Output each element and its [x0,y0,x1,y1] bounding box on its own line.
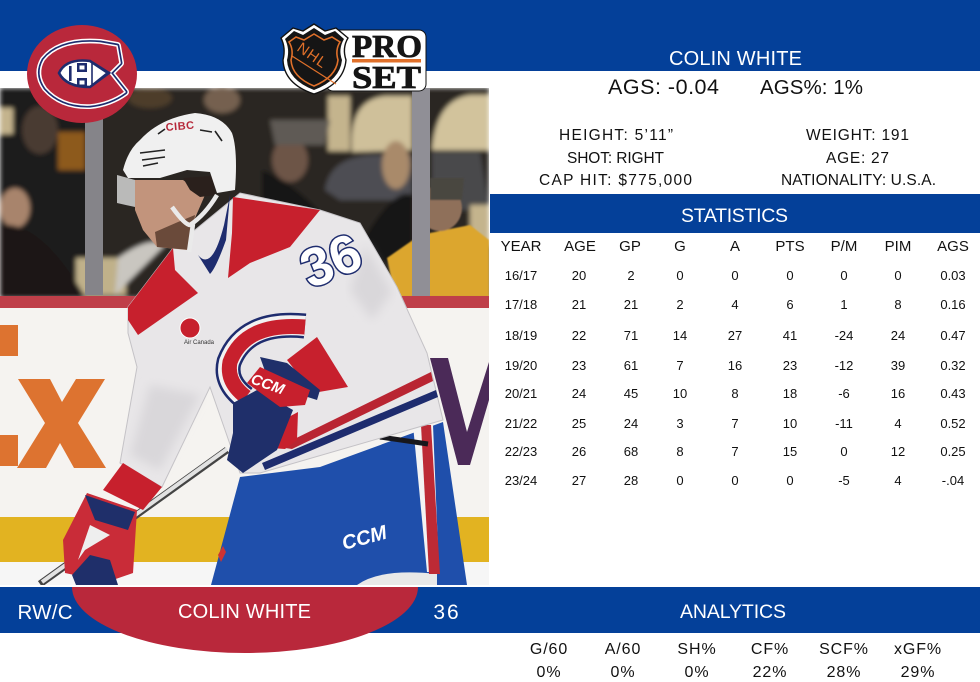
red board cap [0,296,489,308]
row 20/21: 20/21 [505,386,537,401]
row 16/17: 0.03 [940,268,966,283]
SCF% metric [819,641,869,681]
G/60 metric [530,641,568,681]
helmet [123,113,236,252]
pants [211,422,467,585]
panel divider white [489,71,980,194]
SH% metric [677,641,717,681]
Pro Set logo: NHL [294,39,331,72]
player bio: right column: AGE: 27 [826,150,889,167]
row 18/19: 18/19 [505,328,537,343]
player name heading: COLIN WHITE [669,48,802,70]
row 16/17: 2 [627,268,635,283]
board advertisement [0,325,489,468]
row 18/19: 24 [891,328,905,343]
row 22/23: 0 [840,444,848,459]
ice [0,562,489,585]
row 22/23: 7 [731,444,739,459]
player bio: right column [781,127,936,189]
row 23/24: 0 [676,473,684,488]
SCF% metric: 28% [827,664,861,681]
row 20/21: 16 [891,386,905,401]
yellow hoodie spectator [387,178,489,297]
row 17/18: 0.16 [940,297,966,312]
xGF% metric: 29% [901,664,935,681]
table header: PIM [885,238,911,255]
Pro Set logo [281,24,426,95]
helmet: CIBC [165,120,195,134]
row 19/20: 39 [891,358,905,373]
row 22/23: 22/23 [505,444,537,459]
row 22/23 [505,444,966,459]
row 20/21 [505,386,966,401]
row 16/17: 0 [786,268,794,283]
xGF% metric [894,641,942,681]
maple leaf patch: Air Canada [184,340,215,346]
nameplate text: COLIN WHITE [178,601,311,623]
player bio: left column: CAP HIT: $775,000 [539,172,692,189]
row 17/18: 2 [676,297,684,312]
row 20/21: 45 [624,386,638,401]
A/60 metric: A/60 [605,641,641,658]
row 21/22 [505,416,966,431]
table header: PTS [775,238,805,255]
stick [40,449,227,584]
row 20/21: 0.43 [940,386,966,401]
yellow kickplate [0,517,489,562]
bottom band [0,587,980,633]
table header: P/M [831,238,857,255]
row 23/24: 0 [731,473,739,488]
row 18/19: 27 [728,328,742,343]
player bio: right column: NATIONALITY: U.S.A. [781,172,936,189]
row 19/20 [505,358,966,373]
row 23/24: -5 [838,473,850,488]
statistics band [490,194,980,233]
glass stanchions [85,88,430,298]
team logo [27,25,137,123]
row 20/21: 24 [572,386,586,401]
row 19/20: 7 [676,358,684,373]
position: RW/C [18,601,73,624]
row 17/18: 21 [572,297,586,312]
player bio: right column: WEIGHT: 191 [806,127,909,144]
row 21/22: 24 [624,416,638,431]
row 22/23: 0.25 [940,444,966,459]
row 18/19: 22 [572,328,586,343]
AGS percent: AGS%: 1% [760,76,863,99]
SH% metric: 0% [685,664,709,681]
row 16/17: 16/17 [505,268,537,283]
analytics metrics [530,641,942,681]
row 21/22: 10 [783,416,797,431]
band: white strip above photo is left empty [0,71,489,88]
G/60 metric: 0% [537,664,561,681]
row 17/18: 6 [786,297,794,312]
row 17/18: 4 [731,297,739,312]
analytics heading: ANALYTICS [680,601,786,623]
row 17/18: 1 [840,297,848,312]
table header: GP [619,238,641,255]
row 23/24: 0 [786,473,794,488]
row 18/19: -24 [835,328,853,343]
row 17/18: 21 [624,297,638,312]
maple leaf patch [180,318,215,346]
row 21/22: 3 [676,416,684,431]
row 22/23: 12 [891,444,905,459]
xGF% metric: xGF% [894,641,942,658]
row 16/17 [505,268,966,283]
statistics table [501,238,969,488]
pants: CCM [340,521,391,555]
right glove [227,357,320,473]
row 22/23: 8 [676,444,684,459]
row 18/19 [505,328,966,343]
rink boards [0,308,489,517]
player photo [0,87,489,585]
jersey crest [228,325,305,398]
right glove: CCM [249,371,287,399]
Pro Set logo: PRO [352,28,422,64]
row 17/18 [505,297,966,312]
red nameplate [72,587,418,653]
A/60 metric [605,641,641,681]
player bio: left column: SHOT: RIGHT [567,150,665,167]
row 16/17: 0 [894,268,902,283]
statistics heading: STATISTICS [681,205,788,227]
row 21/22: 0.52 [940,416,966,431]
header band [0,0,980,71]
row 17/18: 17/18 [505,297,537,312]
crowd background [0,87,489,298]
row 22/23: 68 [624,444,638,459]
AGS rating: AGS: -0.04 [608,75,719,99]
SCF% metric: SCF% [819,641,869,658]
G/60 metric: G/60 [530,641,568,658]
row 21/22: 4 [894,416,902,431]
CF% metric: 22% [753,664,787,681]
row 21/22: 7 [731,416,739,431]
row 20/21: 18 [783,386,797,401]
table header: YEAR [501,238,542,255]
player [40,113,467,585]
Pro Set logo: SET [352,59,421,95]
row 19/20: 23 [783,358,797,373]
row 16/17: 0 [676,268,684,283]
row 19/20: 16 [728,358,742,373]
row 23/24: 27 [572,473,586,488]
face [135,180,204,250]
table header: AGE [564,238,596,255]
row 19/20: 61 [624,358,638,373]
row 23/24: -.04 [942,473,964,488]
row 21/22: 25 [572,416,586,431]
CF% metric: CF% [751,641,789,658]
row 23/24: 28 [624,473,638,488]
sweater number: 36 [292,222,370,300]
A/60 metric: 0% [611,664,635,681]
row 20/21: 10 [673,386,687,401]
table header: G [674,238,686,255]
visor [117,175,135,207]
row 21/22: 21/22 [505,416,537,431]
row 16/17: 0 [840,268,848,283]
row 23/24 [505,473,964,488]
jersey [120,193,443,487]
row 19/20: 19/20 [505,358,537,373]
row 18/19: 14 [673,328,687,343]
row 16/17: 0 [731,268,739,283]
row 21/22: -11 [835,416,853,431]
row 17/18: 8 [894,297,902,312]
CF% metric [751,641,789,681]
table header [501,238,969,255]
row 18/19: 41 [783,328,797,343]
row 18/19: 0.47 [940,328,966,343]
row 22/23: 26 [572,444,586,459]
table header: AGS [937,238,969,255]
row 16/17: 20 [572,268,586,283]
table header: A [730,238,740,255]
SH% metric: SH% [677,641,717,658]
left glove [63,463,162,585]
row 18/19: 71 [624,328,638,343]
row 22/23: 15 [783,444,797,459]
row 23/24: 23/24 [505,473,537,488]
row 19/20: 23 [572,358,586,373]
sweater number label: 36 [433,601,461,624]
row 20/21: 8 [731,386,739,401]
player bio: left column: HEIGHT: 5’11” [559,127,673,144]
row 19/20: 0.32 [940,358,966,373]
row 19/20: -12 [835,358,853,373]
row 23/24: 4 [894,473,902,488]
row 20/21: -6 [838,386,850,401]
player bio: left column [539,127,692,189]
